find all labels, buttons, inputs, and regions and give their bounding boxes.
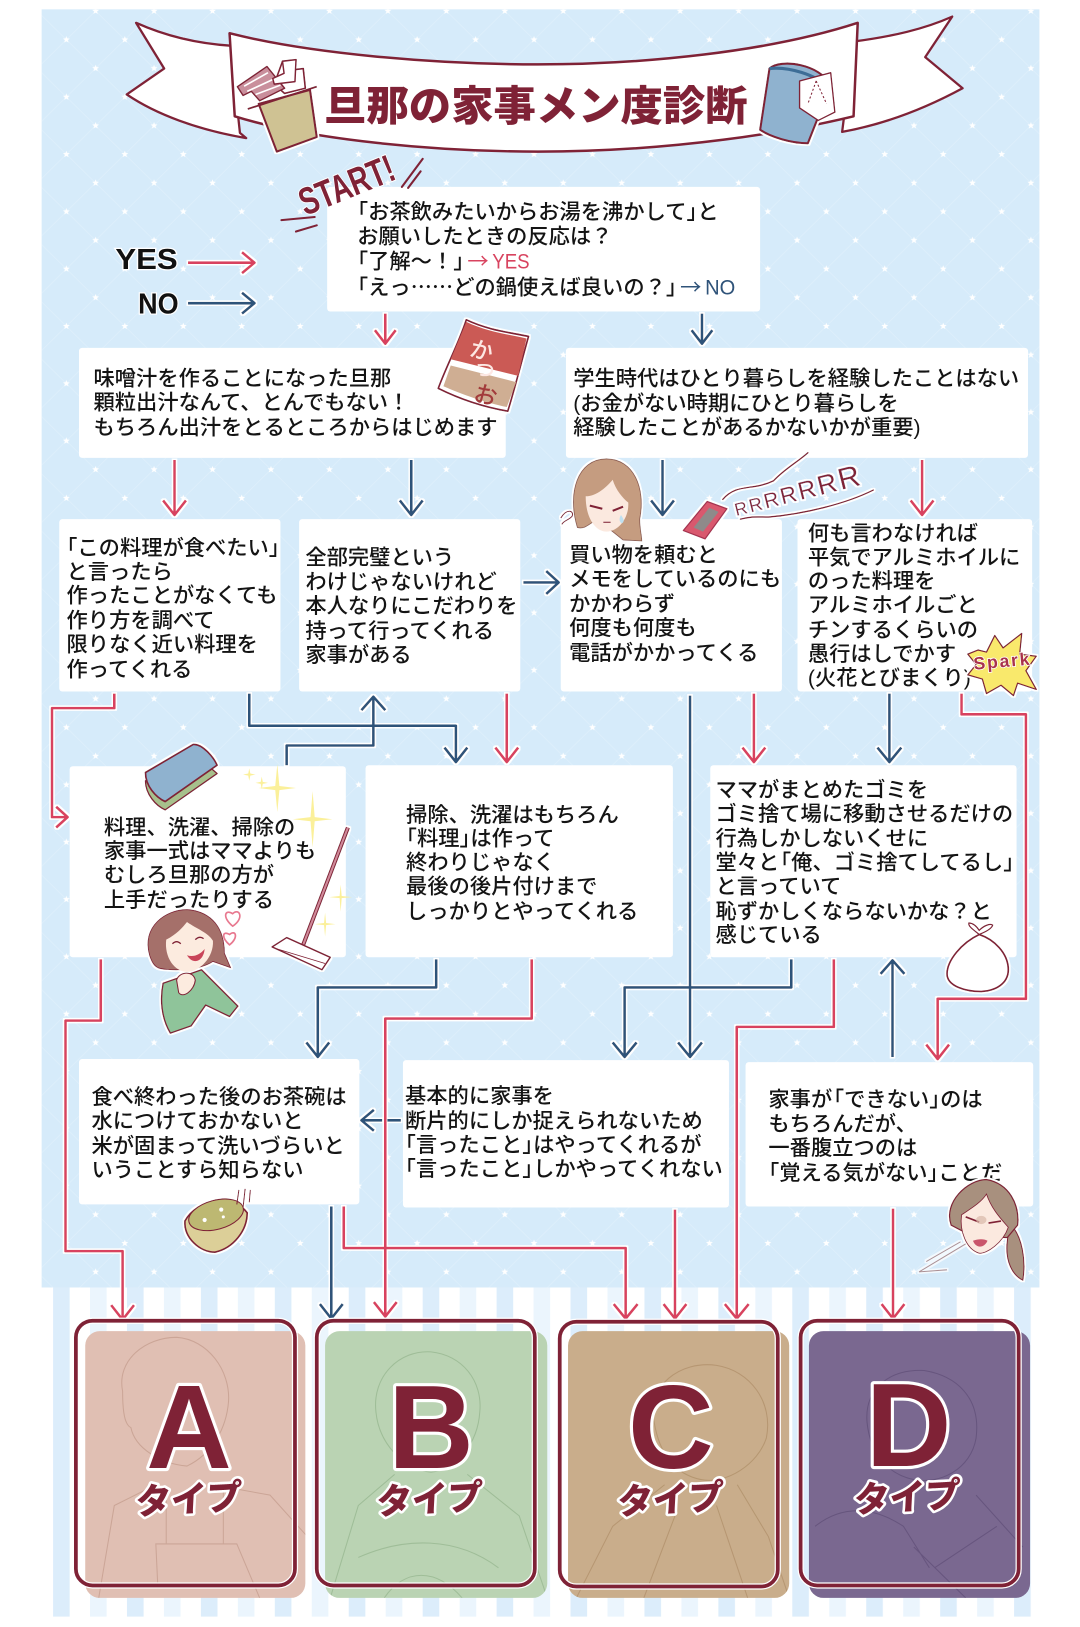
text: fragmented chores [395, 1084, 723, 1181]
text: start question: → [680, 270, 701, 301]
text: fragmented chores: 「言ったこと」しかやってくれない [395, 1157, 723, 1181]
text: fragmented chores: 断片的にしか捉えられないため [405, 1109, 703, 1133]
banner left tail [127, 23, 246, 138]
text: garbage: ゴミ捨て場に移動させるだけの [715, 801, 1013, 826]
icon: floor mop [272, 828, 348, 970]
flow boxes [59, 187, 1033, 1208]
text: living alone: (お金がない時期にひとり暮らしを [573, 392, 899, 416]
text: start question: お願いしたときの反応は？ [357, 224, 612, 248]
text: start question: → [467, 244, 489, 275]
text: start question [347, 200, 735, 301]
arrow shopping no long [678, 696, 702, 1057]
text: requested dish: 作り方を調べて [67, 609, 215, 633]
text: miso soup: もちろん出汁をとるところからはじめます [94, 416, 498, 440]
icon: garbage bag [947, 923, 1008, 992]
title banner [127, 17, 963, 152]
text: requested dish: 限りなく近い料理を [67, 633, 258, 657]
text: garbage: 感じている [715, 922, 822, 947]
arrow up to garbage [881, 960, 904, 1057]
background: blue patterned panel [42, 9, 1039, 1287]
arrow left to rice bowl box [361, 1110, 401, 1131]
text: all chores: 家事一式はママよりも [104, 839, 316, 863]
legend: yes and no: YES [115, 244, 178, 276]
arrow rice bowl no to type B [320, 1206, 343, 1319]
text: requested dish: 作ってくれる [67, 657, 192, 681]
legend arrow yes [188, 252, 254, 273]
text: requested dish: と言ったら [67, 560, 173, 584]
arrow foil no [877, 694, 901, 762]
arrow cleaning yes to type B [374, 959, 532, 1317]
text: requested dish: 「この料理が食べたい」 [56, 536, 290, 560]
text: aluminum foil [808, 521, 1020, 690]
legend: yes and no [115, 244, 179, 321]
text: not perfect: 家事がある [305, 643, 412, 667]
icon: katsuo bag: か [467, 335, 496, 366]
arrow all chores to type A [66, 959, 134, 1320]
text: not perfect [305, 545, 518, 667]
text: cleaning up: しっかりとやってくれる [406, 899, 638, 923]
letter A: A [146, 1362, 232, 1494]
portrait sketch C [576, 1365, 789, 1598]
arrow miso no [400, 460, 423, 515]
text: not perfect: 本人なりにこだわりを [305, 594, 518, 618]
result card: type D [801, 1321, 1030, 1598]
arrow perfect no across [523, 571, 559, 594]
label タイプ C: タイプ [617, 1478, 724, 1523]
icon: bucket with towel [760, 64, 835, 143]
letter D: D [866, 1360, 951, 1492]
text: not willing to learn: 家事が「できない」のは [768, 1087, 983, 1111]
text: shopping: 電話がかかってくる [569, 641, 758, 665]
letter B: B [388, 1362, 474, 1494]
text: not perfect: わけじゃないけれど [305, 570, 497, 594]
text: aluminum foil: 何も言わなければ [808, 521, 978, 545]
text: not willing to learn [758, 1087, 1002, 1185]
banner main band [230, 23, 858, 152]
text: shopping: 買い物を頼むと [569, 543, 718, 567]
text: all chores: むしろ旦那の方が [104, 863, 274, 887]
portrait sketch A [99, 1337, 307, 1598]
label タイプ B: タイプ [376, 1478, 483, 1523]
arrow garbage yes to type C [725, 959, 834, 1319]
icon: spark burst [968, 633, 1036, 696]
text: rice bowl: 食べ終わった後のお茶碗は [91, 1085, 347, 1109]
flow arrows [52, 252, 1026, 1320]
background: striped lower area [53, 1287, 1033, 1617]
text: cleaning up: 終わりじゃなく [406, 851, 555, 875]
text: all chores [104, 815, 316, 912]
text: aluminum foil: のった料理を [808, 569, 935, 593]
illustration: worried woman [561, 459, 642, 541]
arrow all chores up to perfect [287, 697, 385, 765]
banner right tail [842, 17, 963, 132]
arrow start no [692, 314, 712, 344]
icon: katsuo bag: つ [472, 357, 497, 384]
text: requested dish [56, 536, 290, 681]
text: garbage: と言っていて [715, 874, 841, 898]
letter C: C [628, 1362, 714, 1494]
illustration: sighing woman [919, 1179, 1024, 1280]
text: garbage: 行為しかしないくせに [715, 827, 928, 851]
arrow start yes [375, 314, 396, 344]
text: garbage: ママがまとめたゴミを [715, 777, 928, 802]
arrow cleaning no [306, 959, 436, 1057]
text: rice bowl: 米が固まって洗いづらいと [91, 1134, 345, 1158]
text: miso soup [94, 367, 498, 440]
flow text [56, 200, 1024, 1185]
text: all chores: 料理、洗濯、掃除の [104, 815, 295, 839]
text: rice bowl: 水につけておかないと [91, 1109, 303, 1133]
arrow perfect yes [495, 694, 518, 762]
text: miso soup: 顆粒出汁なんて、とんでもない！ [94, 391, 409, 415]
text: start question: 「お茶飲みたいからお湯を沸かして」と [347, 200, 719, 224]
text: start question: 「了解〜！」 [347, 249, 474, 273]
text: miso soup: 味噌汁を作ることになった旦那 [94, 367, 391, 391]
text: start question: YES [492, 249, 530, 273]
arrow student no [651, 460, 674, 515]
text: garbage: 堂々と「俺、ゴミ捨てしてるし」 [715, 850, 1024, 875]
arrow cooking no to cleaning [249, 694, 467, 762]
text: cleaning up: 最後の後片付けまで [406, 874, 597, 898]
text: garbage: 恥ずかしくならないかな？と [715, 899, 992, 923]
arrow student yes [911, 460, 934, 515]
text: rice bowl [91, 1085, 347, 1182]
icon: folded laundry [145, 744, 217, 810]
icon: katsuo bag: お [471, 380, 500, 411]
text: shopping [569, 543, 781, 665]
label タイプ A: タイプ [135, 1478, 242, 1523]
legend: yes and no: NO [138, 289, 179, 321]
text: requested dish: 作ったことがなくても [67, 584, 277, 608]
text: not perfect: 全部完璧という [305, 545, 454, 569]
text: cleaning up: 「料理」は作って [396, 827, 554, 851]
arrow miso yes [163, 460, 186, 515]
legend arrow no [188, 293, 254, 314]
result card: type C [560, 1322, 789, 1598]
arrow cannot to type D [882, 1209, 904, 1319]
arrow cooking yes to all chores [52, 694, 114, 828]
text: aluminum foil: チンするくらいの [808, 618, 978, 642]
result card: type B [317, 1321, 547, 1598]
text: cleaning up [396, 803, 638, 923]
text: aluminum foil: 平気でアルミホイルに [808, 545, 1020, 569]
icon: rice bowl [185, 1189, 250, 1252]
icon: spark burst: Spark [973, 649, 1030, 674]
text: living alone: 学生時代はひとり暮らしを経験したことはない [573, 367, 1019, 391]
text: shopping: かかわらず [569, 592, 675, 616]
text: not willing to learn: 「覚える気がない」ことだ [758, 1161, 1002, 1185]
text: rice bowl: いうことすら知らない [91, 1158, 303, 1182]
text: shopping: メモをしているのにも [569, 567, 781, 591]
start label [281, 147, 423, 232]
icon: laundry basket with clothes [237, 60, 317, 152]
icon: hearts [224, 912, 240, 945]
text: living alone: 経験したことがあるかないかが重要) [573, 416, 921, 440]
illustration: ringing phone [683, 453, 873, 539]
text: aluminum foil: (火花とびまくり) [808, 666, 971, 690]
text: living alone [573, 367, 1019, 440]
text: shopping: 何度も何度も [569, 616, 697, 640]
icon: sparkles [243, 764, 352, 937]
arrow fragment yes to type C [664, 1210, 686, 1319]
text: not willing to learn: もちろんだが、 [768, 1112, 917, 1136]
arrow rice bowl yes to type C [344, 1206, 638, 1319]
text: fragmented chores: 「言ったこと」はやってくれるが [395, 1133, 702, 1157]
text: cleaning up: 掃除、洗濯はもちろん [406, 803, 619, 827]
text: aluminum foil: アルミホイルごと [808, 593, 978, 617]
text: garbage [715, 777, 1024, 947]
text: not willing to learn: 一番腹立つのは [768, 1136, 917, 1160]
text: start question: NO [705, 275, 735, 299]
label タイプ D: タイプ [853, 1476, 961, 1520]
text: not perfect: 持って行ってくれる [305, 619, 494, 643]
portrait sketch D [815, 1370, 1023, 1598]
text: start question: 「えっ……どの鍋使えば良いの？」 [347, 270, 687, 301]
arrow foil yes route [926, 694, 1026, 1059]
arrow shopping yes [742, 694, 765, 762]
result card: type A [76, 1321, 307, 1598]
portrait sketch B [330, 1352, 547, 1598]
text: aluminum foil: 愚行はしでかす [808, 642, 956, 666]
title text: 旦那の家事メン度診断 [324, 82, 748, 129]
START text: START! [293, 147, 401, 224]
illustration: happy woman [148, 910, 238, 1033]
icon: katsuo bag [438, 320, 529, 411]
text: fragmented chores: 基本的に家事を [405, 1084, 554, 1108]
vibration text: RRRRRRR [730, 459, 864, 523]
arrow garbage no [613, 959, 791, 1057]
text: all chores: 上手だったりする [104, 888, 274, 912]
